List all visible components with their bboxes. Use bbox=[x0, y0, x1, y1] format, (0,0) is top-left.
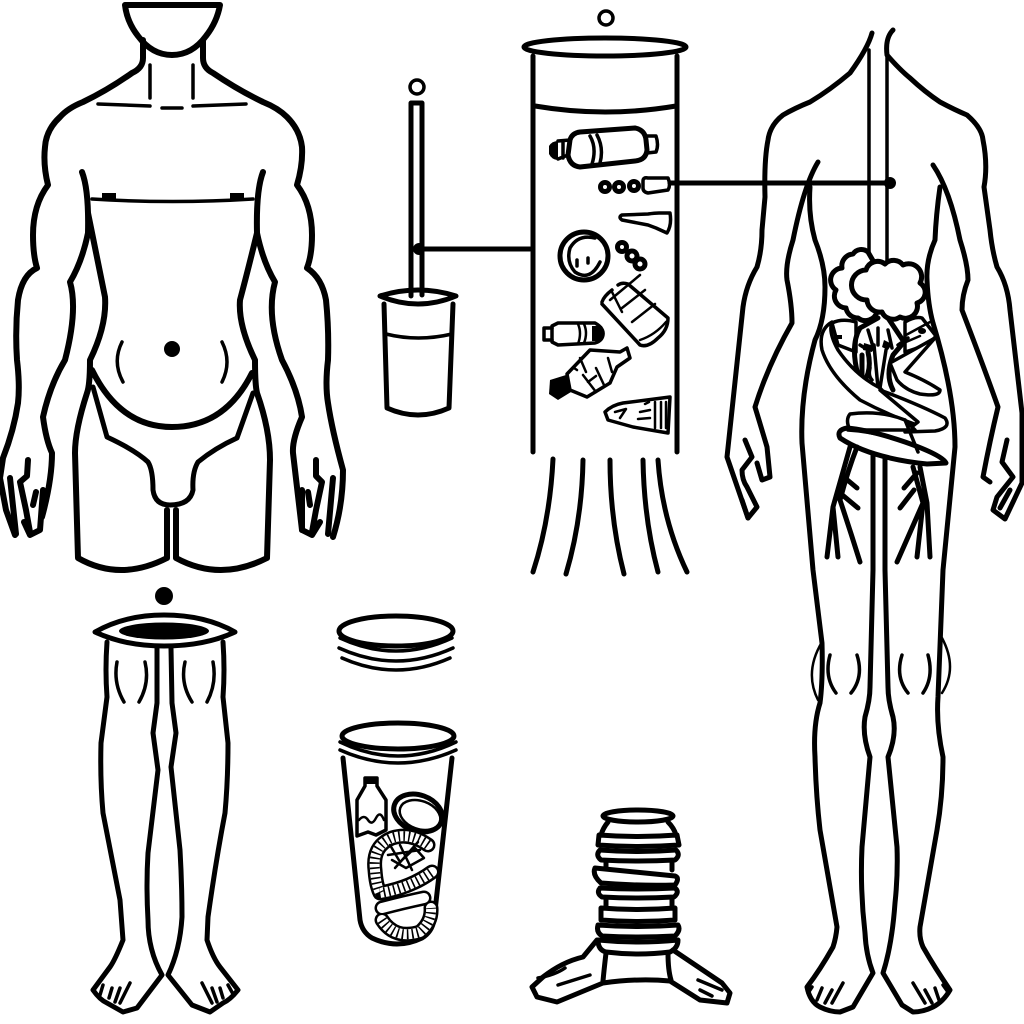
toes bbox=[808, 983, 948, 1003]
coiled tube in jar bbox=[375, 836, 432, 934]
icon: plunger rod and cup bbox=[380, 80, 530, 415]
bottle bbox=[549, 128, 658, 167]
central organ tangle bbox=[854, 318, 908, 390]
torso sides and legs bbox=[802, 187, 955, 1012]
upper right ribbon bbox=[890, 338, 940, 395]
navel bbox=[164, 341, 180, 357]
figure: standing body with organs bbox=[727, 30, 1022, 1012]
figure: legs with open waist bbox=[93, 587, 238, 1012]
beads and connector bbox=[600, 177, 896, 193]
kidneys and organ boxes bbox=[832, 318, 936, 352]
drips below tube bbox=[533, 459, 687, 574]
outer body contour bbox=[0, 40, 343, 537]
neck cup bbox=[125, 5, 220, 55]
round lid in jar bbox=[388, 788, 448, 838]
shoulders and outer arms bbox=[727, 30, 1022, 518]
lungs cloud bbox=[831, 249, 890, 321]
knees bbox=[812, 638, 950, 700]
icon: stacked discs on splayed base bbox=[532, 810, 730, 1003]
chest band bbox=[92, 199, 253, 202]
connector line to tube bbox=[419, 246, 530, 252]
figure: male torso front view bbox=[0, 5, 343, 570]
spine lines upper bbox=[869, 50, 887, 264]
bottle in jar bbox=[357, 778, 386, 836]
panel: tube with debris bbox=[524, 11, 896, 574]
left hand fingers bbox=[742, 440, 757, 518]
left hand bbox=[10, 460, 43, 535]
right hand fingers bbox=[993, 440, 1022, 519]
inner arms bbox=[42, 172, 302, 530]
beads diagonal bbox=[618, 242, 645, 269]
wedge fragment bbox=[605, 397, 670, 433]
branching vessels left bbox=[827, 447, 860, 562]
branching vessels right bbox=[897, 467, 930, 562]
lower ribbon bands bbox=[848, 413, 915, 430]
big ribbon band bbox=[821, 322, 926, 427]
inner arm lines bbox=[755, 162, 998, 482]
crumpled packet bbox=[602, 275, 668, 346]
icon: stacked disc lid bbox=[339, 616, 453, 670]
small plug bbox=[620, 213, 671, 233]
small vial bbox=[544, 323, 604, 345]
right hand bbox=[302, 460, 333, 535]
brief lower edge bbox=[93, 387, 253, 505]
abdomen marks bbox=[117, 342, 227, 382]
icon: jar with debris bbox=[340, 723, 456, 944]
crushed bottle bbox=[549, 348, 630, 400]
torso sides bbox=[75, 213, 270, 570]
neck and collar marks bbox=[98, 65, 246, 108]
chest studs bbox=[102, 193, 244, 199]
brief band bbox=[92, 370, 252, 427]
round lid face bbox=[560, 232, 608, 280]
